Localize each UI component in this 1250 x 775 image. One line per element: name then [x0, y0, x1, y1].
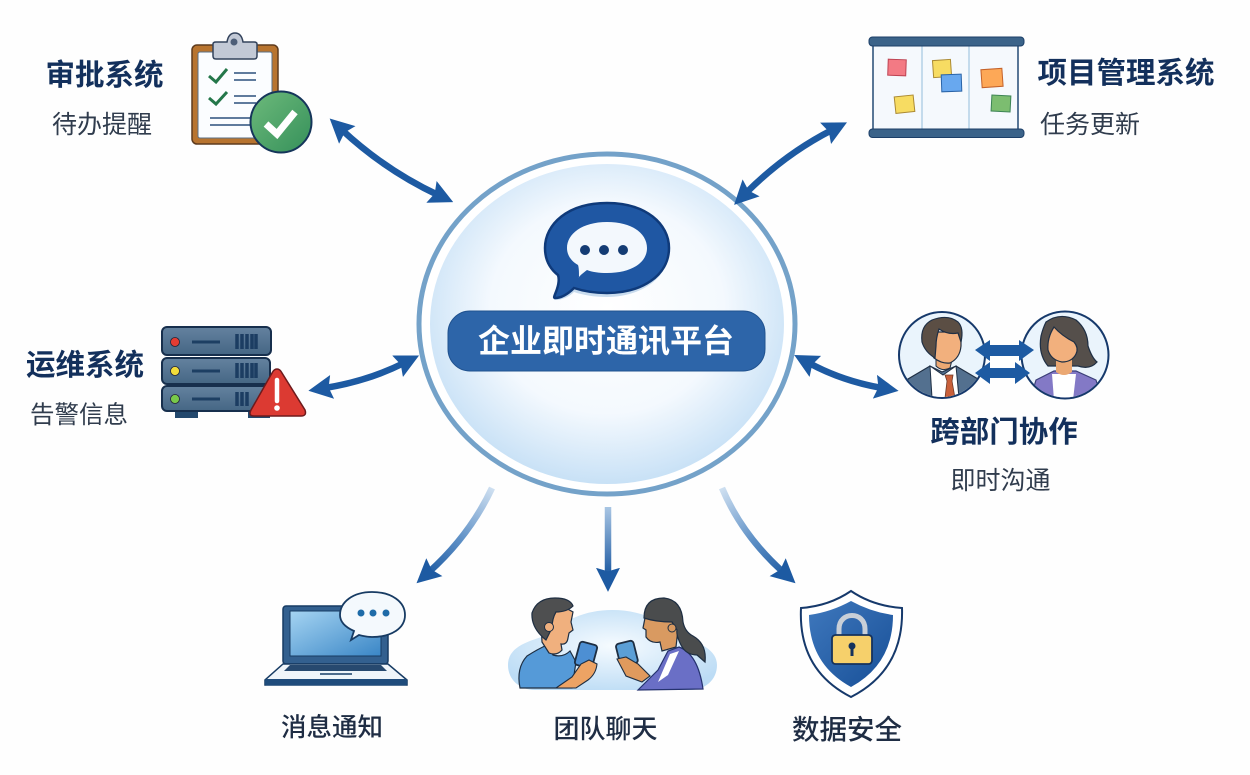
panel: cross-department collaboration — [899, 312, 1108, 495]
icon: central chat bubble — [545, 203, 669, 300]
icon: clipboard with check — [192, 33, 312, 152]
text: ops subtitle: 告警信息 — [30, 401, 128, 429]
text: approval subtitle: 待办提醒 — [52, 111, 152, 139]
heading: ops system: 运维系统 — [26, 349, 144, 382]
heading: approval system: 审批系统 — [45, 59, 164, 92]
central title pill — [448, 311, 765, 371]
panel: approval system — [45, 33, 312, 152]
panel: team chat — [508, 598, 717, 744]
panel: data security — [792, 591, 902, 745]
icon: people chatting on phones — [508, 598, 717, 690]
icon: shield with lock — [801, 591, 902, 697]
panel: project management system — [869, 37, 1215, 139]
text: data security label: 数据安全 — [792, 714, 902, 745]
central title pill: 企业即时通讯平台 — [478, 323, 734, 359]
text: team chat label: 团队聊天 — [553, 714, 658, 744]
heading: collaboration: 跨部门协作 — [930, 416, 1078, 449]
arrow: platform to notifications — [429, 488, 492, 572]
text: message notifications label: 消息通知 — [281, 714, 383, 742]
text: project subtitle: 任务更新 — [1040, 111, 1140, 139]
icon: server stack with alert — [162, 327, 306, 418]
icon: kanban board — [869, 37, 1024, 138]
text: collaboration subtitle: 即时沟通 — [950, 467, 1051, 495]
arrow: platform to collaboration — [809, 363, 882, 388]
icon: two people exchanging — [899, 312, 1108, 400]
arrow: project management to platform — [746, 130, 832, 193]
woman — [638, 647, 703, 690]
panel: message notifications — [265, 592, 407, 742]
woman — [1034, 316, 1098, 398]
arrow: platform to team chat — [605, 507, 611, 575]
arrow: ops to platform — [325, 363, 404, 388]
panel: ops system — [26, 327, 306, 429]
arrow: platform to data security — [722, 488, 783, 572]
icon: laptop with chat bubble — [265, 592, 407, 686]
man — [908, 316, 978, 397]
exchange arrows — [975, 340, 1034, 361]
heading: project management: 项目管理系统 — [1037, 57, 1215, 90]
man — [519, 645, 576, 688]
central platform circle — [419, 154, 795, 494]
arrow: approval to platform — [342, 130, 438, 195]
